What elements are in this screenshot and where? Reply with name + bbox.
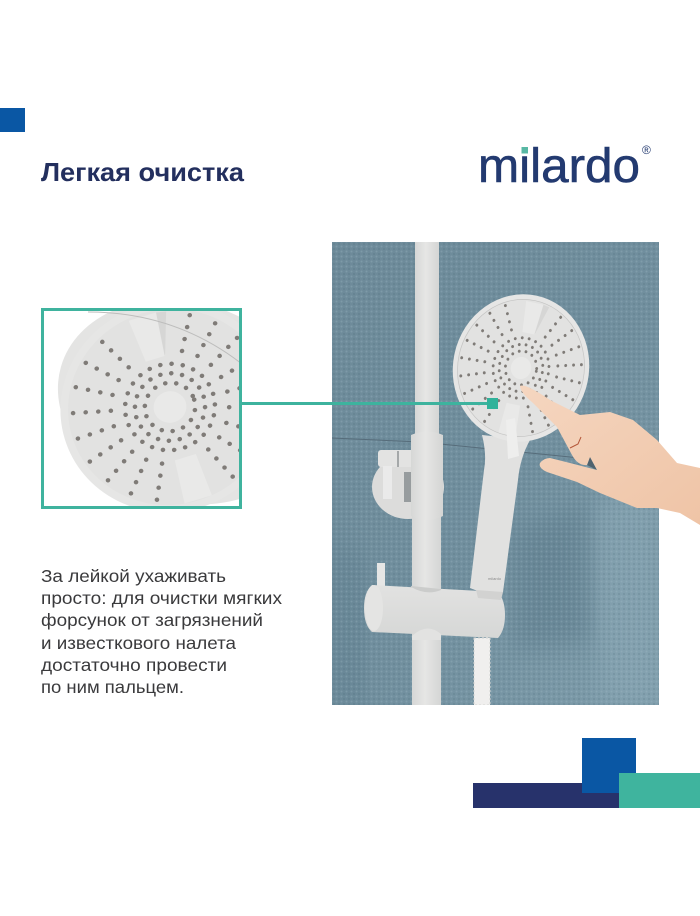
description text: достаточно провести xyxy=(41,655,227,675)
rail tube xyxy=(411,242,443,705)
shower head with nozzles xyxy=(452,294,590,441)
decorative blue square top left xyxy=(0,108,25,132)
hand touching nozzles xyxy=(520,386,700,525)
finger shadow on wall xyxy=(587,457,597,470)
logo: milardo: milardo xyxy=(478,140,640,193)
product photo: shower system on blue wall xyxy=(332,242,659,705)
hand shower handle: milardo xyxy=(488,576,502,581)
title: Легкая очистка xyxy=(41,157,245,187)
description text: по ним пальцем. xyxy=(41,677,184,697)
decorative blocks bottom right xyxy=(473,738,700,808)
description text xyxy=(41,566,282,697)
shower head lower ridge xyxy=(506,432,519,459)
description text: просто: для очистки мягких xyxy=(41,588,282,608)
wall background xyxy=(332,242,659,705)
inset: enlarged nozzle view xyxy=(41,308,242,509)
enlarged shower head xyxy=(58,311,239,504)
logo: milardo: ® xyxy=(642,143,651,157)
connector line with square marker xyxy=(241,398,498,409)
description text: и известкового налета xyxy=(41,633,236,653)
pin and slider xyxy=(364,563,505,640)
hand shower handle xyxy=(470,435,530,600)
description text: форсунок от загрязнений xyxy=(41,610,263,630)
finger crease xyxy=(570,437,581,448)
description text: За лейкой ухаживать xyxy=(41,566,226,586)
wall bracket xyxy=(372,450,444,519)
hose xyxy=(474,638,490,705)
